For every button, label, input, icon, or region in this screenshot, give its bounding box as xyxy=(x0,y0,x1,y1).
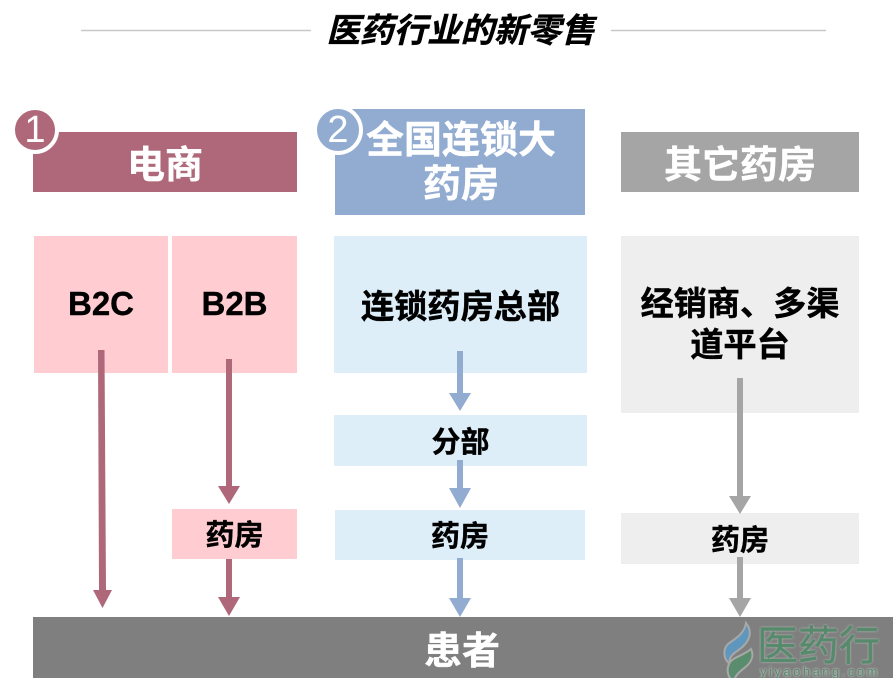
box: 药房 chain: 药房 xyxy=(431,521,489,553)
box: 经销商、多渠道平台: 道平台 xyxy=(690,326,790,364)
badge: number 2 xyxy=(313,105,363,155)
box: 分部: 分部 xyxy=(431,426,490,458)
watermark logo: 医药行 xyxy=(723,621,880,678)
box: 连锁药房总部 xyxy=(334,236,587,373)
box: 经销商、多渠道平台: 经销商、多渠 xyxy=(640,286,840,322)
box: 经销商、多渠道平台 xyxy=(621,236,859,413)
box: B2B: B2B xyxy=(201,284,268,322)
title: 医药行业的新零售 xyxy=(326,13,594,50)
box: B2C: B2C xyxy=(68,284,134,322)
logo text: 医药行 xyxy=(757,623,880,669)
badge: number 2: 2 xyxy=(327,108,349,150)
badge: number 1 xyxy=(11,106,59,154)
box: 药房 other xyxy=(621,513,859,564)
box: 药房 chain xyxy=(335,510,585,560)
bar: 患者: 患者 xyxy=(424,631,500,673)
icon: helix xyxy=(723,621,754,678)
box: B2C xyxy=(34,236,168,373)
panel header: 电商 xyxy=(33,132,297,192)
box: 分部 xyxy=(334,415,587,466)
panel header: 其它药房: 其它药房 xyxy=(664,144,816,186)
box: 药房 B2B xyxy=(172,509,297,559)
box: 药房 other: 药房 xyxy=(711,525,769,557)
box: 药房 B2B: 药房 xyxy=(205,520,264,552)
panel header: 全国连锁大药房: 药房 xyxy=(423,164,499,206)
badge: number 1: 1 xyxy=(24,108,46,150)
box: 连锁药房总部: 连锁药房总部 xyxy=(361,289,560,326)
box: B2B xyxy=(172,236,297,373)
panel header: 全国连锁大药房 xyxy=(335,109,585,215)
panel header: 其它药房 xyxy=(621,132,859,192)
panel header: 全国连锁大药房: 全国连锁大 xyxy=(366,120,556,162)
panel header: 电商: 电商 xyxy=(127,144,203,186)
bar: 患者 xyxy=(33,617,893,678)
